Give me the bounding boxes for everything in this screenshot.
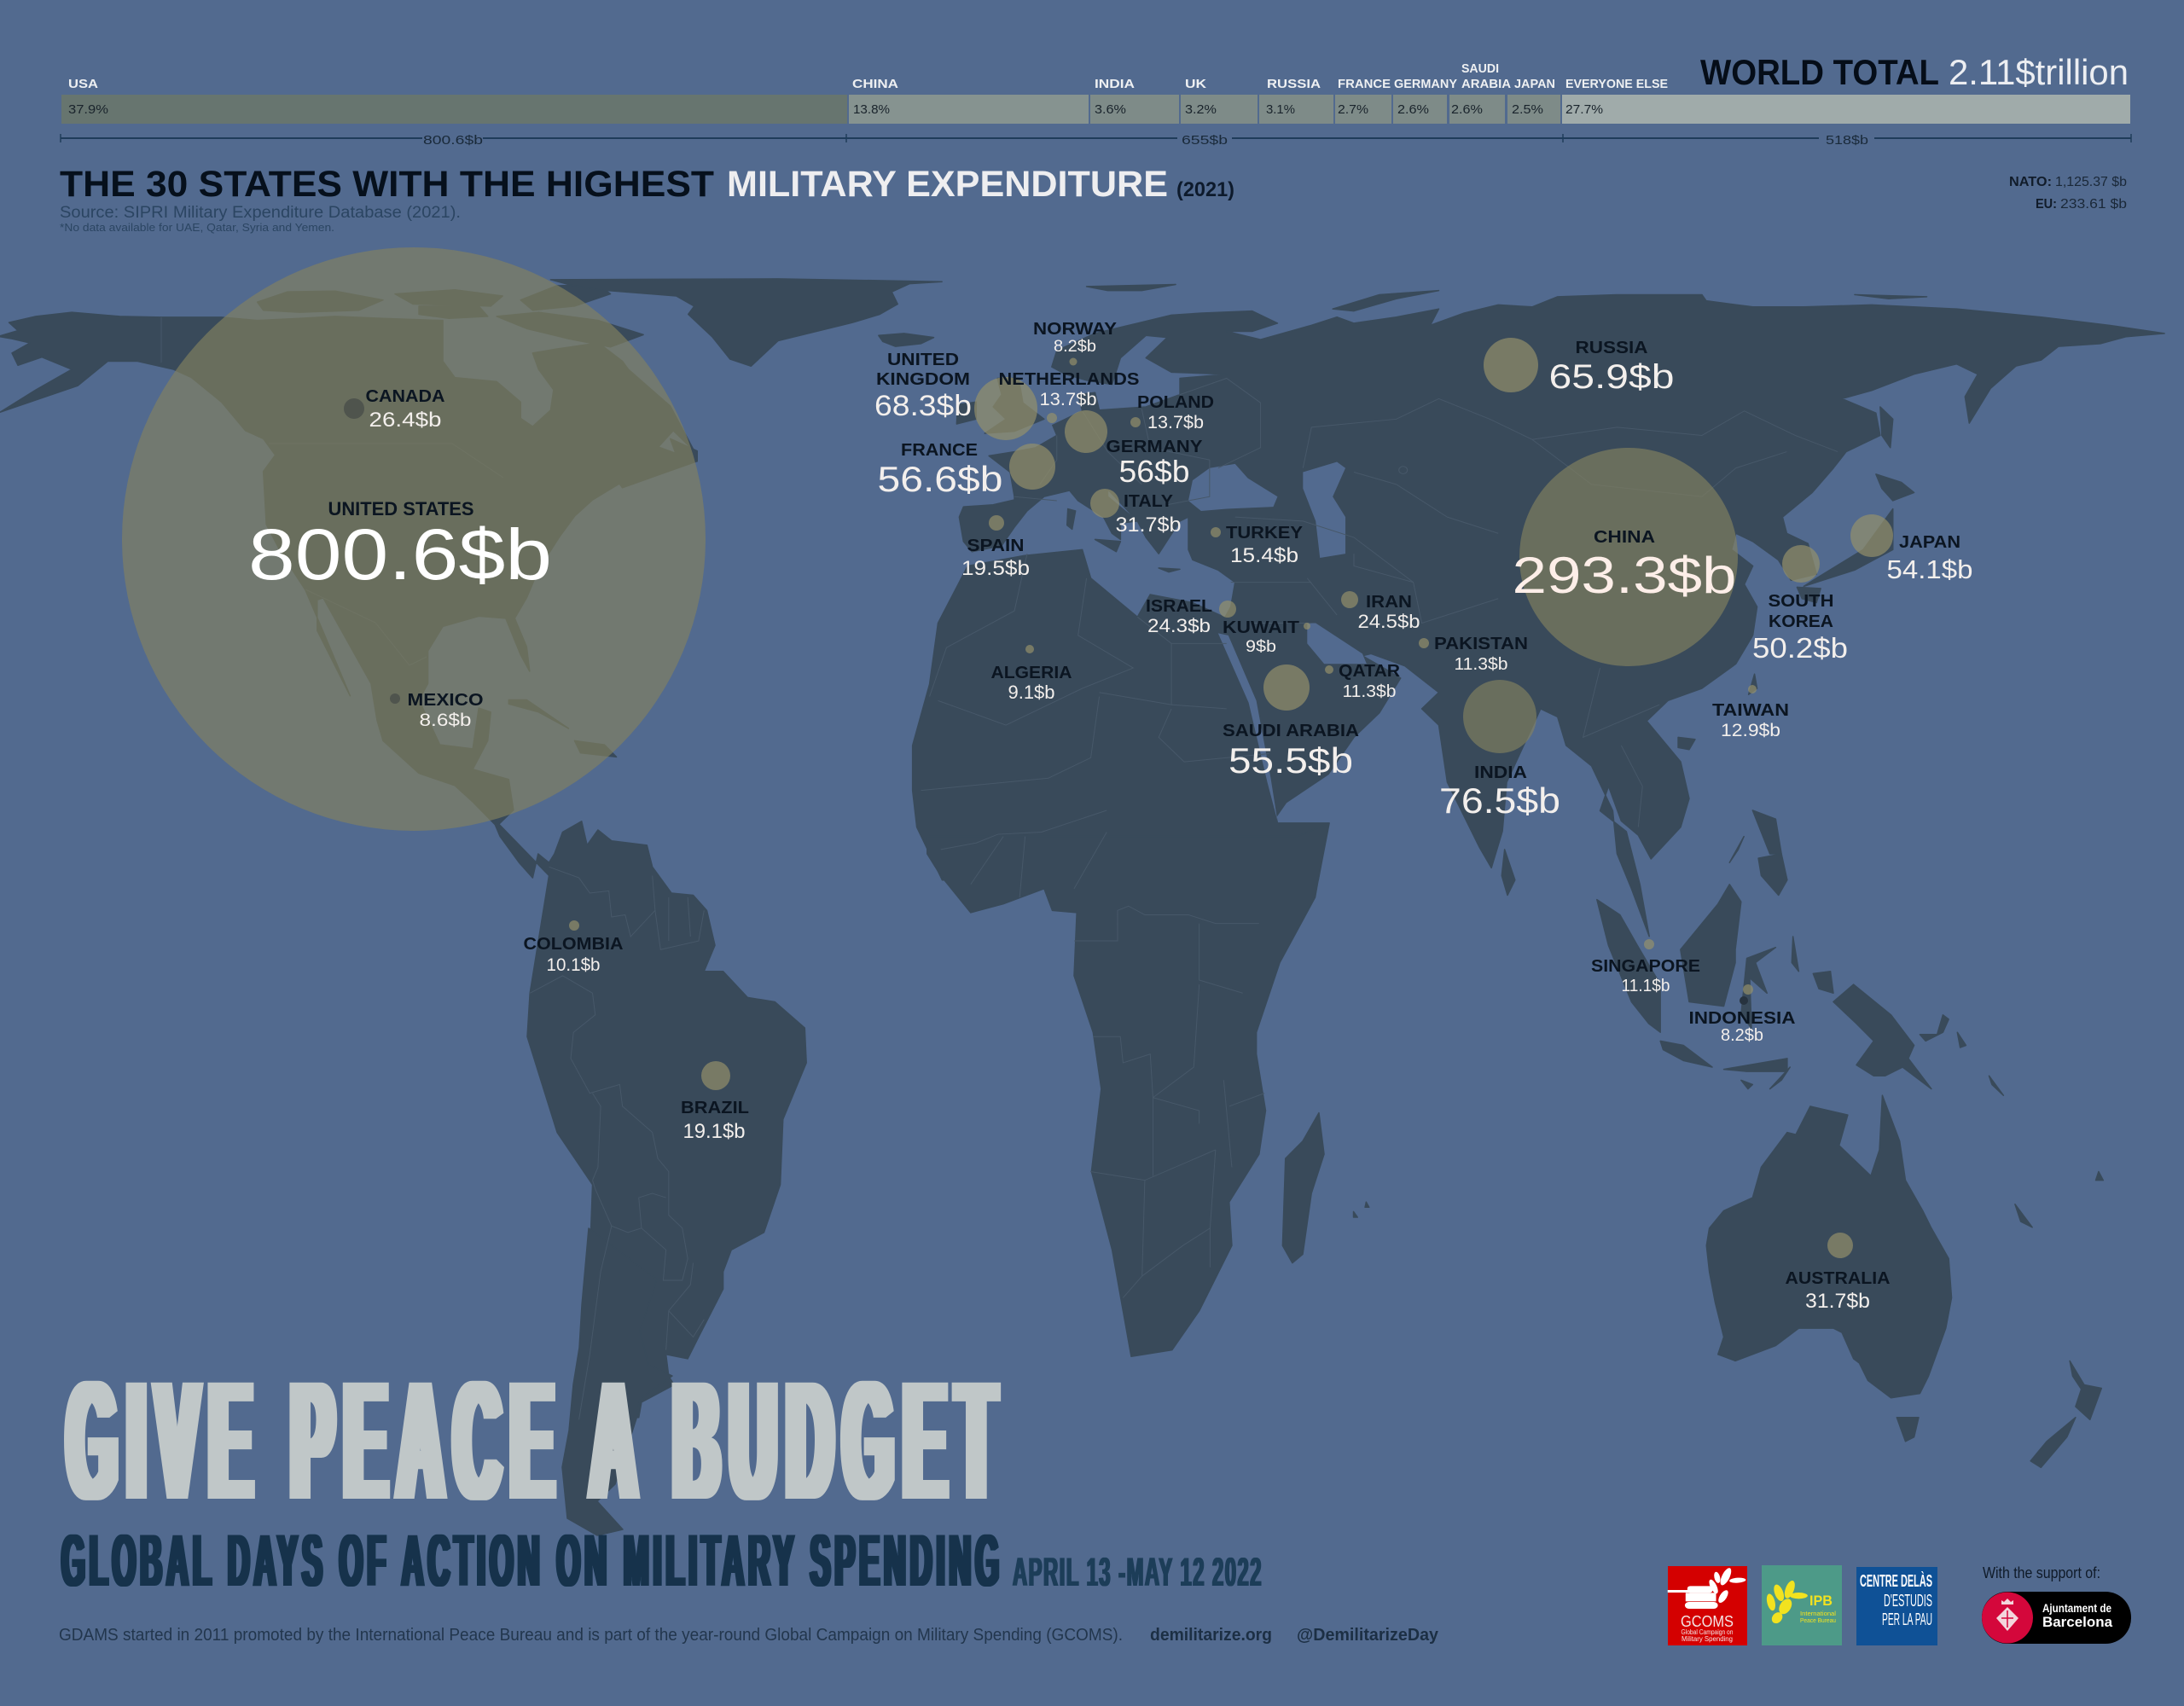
- bar percentages: 2.6%: [1451, 102, 1483, 117]
- label: indonesia: [1689, 1009, 1795, 1045]
- bar country names: JAPAN: [1514, 77, 1555, 91]
- label: brazil: 19.1$b: [682, 1120, 746, 1143]
- label: taiwan: TAIWAN: [1712, 701, 1789, 720]
- bracket scale: 655$b: [1182, 133, 1228, 148]
- label: russia: RUSSIA: [1575, 339, 1648, 357]
- support caption: With the support of:: [1983, 1564, 2100, 1581]
- bar percentages: 2.6%: [1397, 102, 1429, 117]
- logo: centre delas: CENTRE DELÀS: [1860, 1571, 1932, 1591]
- nato and eu totals: NATO:: [2009, 175, 2052, 189]
- subheadline: APRIL 13 -MAY 12 2022: [1013, 1549, 1263, 1594]
- logo: ajuntament de barcelona: Barcelona: [2042, 1614, 2113, 1630]
- label: spain: SPAIN: [967, 537, 1024, 555]
- bracket scale: [61, 133, 2131, 148]
- label: poland: [1137, 393, 1214, 432]
- label: brazil: BRAZIL: [681, 1099, 749, 1117]
- label: south korea: KOREA: [1769, 612, 1833, 631]
- logo: ipb: IPB: [1809, 1593, 1833, 1609]
- label: iran: 24.5$b: [1358, 611, 1420, 632]
- label: russia: [1549, 339, 1674, 396]
- label: netherlands: NETHERLANDS: [998, 370, 1140, 389]
- label: algeria: 9.1$b: [1008, 682, 1054, 703]
- label: china: 293.3$b: [1512, 547, 1737, 604]
- label: saudi arabia: 55.5$b: [1228, 740, 1353, 780]
- logo: gcoms: [1668, 1566, 1747, 1645]
- label: indonesia: INDONESIA: [1689, 1009, 1795, 1028]
- label: india: INDIA: [1474, 763, 1527, 782]
- bar country names: UK: [1185, 77, 1206, 91]
- label: mexico: 8.6$b: [420, 711, 471, 730]
- patagonia: [562, 1228, 672, 1535]
- label: italy: ITALY: [1124, 492, 1174, 511]
- bar country names: CHINA: [852, 77, 898, 91]
- label: united kingdom: 68.3$b: [874, 390, 972, 422]
- label: brazil: [681, 1099, 749, 1143]
- label: australia: [1785, 1269, 1891, 1313]
- bar country names: SAUDI: [1461, 61, 1499, 76]
- label: canada: CANADA: [365, 387, 445, 406]
- bracket scale: 800.6$b: [423, 133, 483, 148]
- nato and eu totals: 1,125.37 $b: [2055, 175, 2127, 189]
- label: australia: AUSTRALIA: [1785, 1269, 1891, 1288]
- logo: centre delas: PER LA PAU: [1882, 1610, 1932, 1629]
- label: turkey: [1226, 524, 1304, 567]
- eurasia: [879, 284, 2164, 937]
- label: france: [877, 441, 1003, 499]
- label: china: CHINA: [1594, 528, 1655, 547]
- bar percentages: 2.7%: [1338, 102, 1368, 117]
- logo: ipb: [1762, 1565, 1842, 1645]
- label: italy: [1116, 492, 1181, 537]
- nato and eu totals: [2009, 175, 2127, 212]
- label: south korea: [1752, 592, 1848, 664]
- bar percentages: [68, 102, 1603, 117]
- label: germany: GERMANY: [1106, 438, 1203, 456]
- label: poland: POLAND: [1137, 393, 1214, 412]
- bar percentages: 37.9%: [68, 102, 108, 117]
- bar percentages: 2.5%: [1512, 102, 1543, 117]
- bar segments: [61, 95, 2130, 124]
- label: india: 76.5$b: [1439, 780, 1560, 821]
- label: qatar: [1339, 662, 1401, 701]
- label: kuwait: [1223, 618, 1299, 656]
- bar percentages: 3.6%: [1095, 102, 1126, 117]
- label: turkey: 15.4$b: [1230, 544, 1298, 567]
- world total: 2.11$trillion: [1949, 52, 2129, 92]
- label: netherlands: 13.7$b: [1039, 390, 1097, 409]
- label: japan: JAPAN: [1899, 533, 1960, 552]
- label: india: [1439, 763, 1560, 821]
- bar percentages: 13.8%: [853, 102, 890, 117]
- logo: ajuntament de barcelona: [1982, 1592, 2131, 1644]
- footer text: @DemilitarizeDay: [1297, 1626, 1439, 1645]
- label: norway: [1033, 320, 1118, 356]
- bar country names: FRANCE: [1338, 77, 1391, 91]
- label: russia: 65.9$b: [1549, 358, 1674, 396]
- label: kuwait: 9$b: [1246, 638, 1276, 656]
- source note: Source: SIPRI Military Expenditure Database (2021).: [60, 204, 461, 222]
- label: japan: 54.1$b: [1887, 554, 1972, 584]
- label: taiwan: 12.9$b: [1721, 721, 1780, 740]
- bar country names: RUSSIA: [1267, 77, 1321, 91]
- logo: ipb: Peace Bureau: [1800, 1618, 1836, 1624]
- label: qatar: 11.3$b: [1343, 682, 1396, 701]
- label: pakistan: 11.3$b: [1454, 655, 1508, 674]
- north america and greenland: [0, 279, 942, 827]
- footer text: demilitarize.org: [1150, 1626, 1272, 1645]
- bar percentages: 3.2%: [1185, 102, 1217, 117]
- bubbles: military expenditure by country: [122, 247, 1893, 1258]
- label: kuwait: KUWAIT: [1223, 618, 1299, 637]
- logo: centre delas: D'ESTUDIS: [1884, 1592, 1932, 1610]
- label: united kingdom: KINGDOM: [876, 370, 970, 389]
- bracket scale: 518$b: [1826, 133, 1868, 148]
- footer text: GDAMS started in 2011 promoted by the International Peace Bureau and is part of the year-round Global Campaign on Military Spending (GCOMS).: [59, 1626, 1123, 1645]
- label: taiwan: [1712, 701, 1789, 740]
- label: france: 56.6$b: [877, 459, 1003, 499]
- label: algeria: [991, 664, 1072, 703]
- label: israel: ISRAEL: [1146, 597, 1212, 616]
- label: spain: 19.5$b: [961, 557, 1030, 580]
- section title: (2021): [1176, 178, 1234, 201]
- label: australia: 31.7$b: [1805, 1290, 1870, 1313]
- south america and southern africa: [492, 817, 1328, 1419]
- label: mexico: MEXICO: [408, 691, 483, 710]
- label: singapore: [1591, 957, 1700, 995]
- asia pacific islands and oceania: [1282, 810, 2103, 1467]
- label: qatar: QATAR: [1339, 662, 1401, 681]
- label: italy: 31.7$b: [1116, 514, 1181, 537]
- country borders: [161, 317, 1838, 1419]
- world total: WORLD TOTAL: [1700, 52, 1939, 92]
- logo: ipb: International: [1800, 1611, 1836, 1617]
- label: united kingdom: UNITED: [887, 351, 959, 369]
- label: norway: 8.2$b: [1054, 338, 1096, 356]
- section title: THE 30 STATES WITH THE HIGHEST: [60, 164, 714, 205]
- label: south korea: 50.2$b: [1752, 632, 1848, 664]
- label: singapore: SINGAPORE: [1591, 957, 1700, 976]
- country labels: [248, 320, 1972, 1313]
- label: indonesia: 8.2$b: [1721, 1026, 1763, 1045]
- bar percentages: 3.1%: [1266, 102, 1295, 117]
- world map: [0, 279, 2164, 1535]
- label: colombia: [524, 935, 623, 975]
- label: south korea: SOUTH: [1768, 592, 1834, 611]
- bar country names: [68, 61, 1668, 91]
- label: pakistan: PAKISTAN: [1434, 635, 1528, 653]
- label: mexico: [408, 691, 483, 730]
- label: norway: NORWAY: [1033, 320, 1118, 339]
- label: israel: 24.3$b: [1147, 615, 1211, 636]
- bar country names: USA: [68, 77, 98, 91]
- world share stacked bar: [61, 61, 2131, 148]
- nato and eu totals: EU:: [2036, 197, 2057, 212]
- label: canada: 26.4$b: [369, 409, 442, 432]
- section title: MILITARY EXPENDITURE: [727, 164, 1168, 205]
- bar country names: EVERYONE ELSE: [1565, 77, 1668, 91]
- label: colombia: 10.1$b: [546, 955, 601, 975]
- subheadline: [61, 1520, 1263, 1602]
- logo: gcoms: Military Spending: [1682, 1635, 1733, 1643]
- label: united kingdom: [874, 351, 972, 422]
- label: pakistan: [1434, 635, 1528, 674]
- label: japan: [1887, 533, 1972, 584]
- bar country names: INDIA: [1095, 77, 1135, 91]
- label: united states: 800.6$b: [248, 514, 552, 595]
- label: iran: [1358, 593, 1420, 632]
- logo: gcoms: Global Campaign on: [1681, 1628, 1734, 1636]
- label: spain: [961, 537, 1030, 580]
- logo: gcoms: GCOMS: [1681, 1613, 1734, 1630]
- label: china: [1512, 528, 1737, 604]
- world total: [1700, 52, 2129, 92]
- label: united states: UNITED STATES: [328, 498, 474, 519]
- logo: ajuntament de barcelona: Ajuntament de: [2042, 1601, 2111, 1615]
- label: france: FRANCE: [901, 441, 978, 460]
- bar country names: ARABIA: [1461, 77, 1511, 91]
- logo: centre delas: [1856, 1567, 1937, 1645]
- label: saudi arabia: [1223, 722, 1359, 780]
- label: iran: IRAN: [1366, 593, 1412, 612]
- label: algeria: ALGERIA: [991, 664, 1072, 682]
- bar country names: GERMANY: [1394, 77, 1457, 91]
- label: israel: [1146, 597, 1212, 636]
- label: netherlands: [998, 370, 1140, 409]
- label: colombia: COLOMBIA: [524, 935, 623, 954]
- section title: [60, 164, 1234, 205]
- source note: *No data available for UAE, Qatar, Syria and Yemen.: [60, 221, 334, 234]
- label: turkey: TURKEY: [1226, 524, 1304, 543]
- label: poland: 13.7$b: [1147, 413, 1204, 432]
- label: germany: 56$b: [1119, 454, 1189, 489]
- label: saudi arabia: SAUDI ARABIA: [1223, 722, 1359, 740]
- nato and eu totals: 233.61 $b: [2060, 197, 2127, 212]
- label: canada: [365, 387, 445, 432]
- source note: [60, 204, 461, 234]
- label: germany: [1106, 438, 1203, 489]
- label: singapore: 11.1$b: [1621, 977, 1670, 995]
- bar percentages: 27.7%: [1565, 102, 1603, 117]
- inland seas: [1188, 462, 1367, 821]
